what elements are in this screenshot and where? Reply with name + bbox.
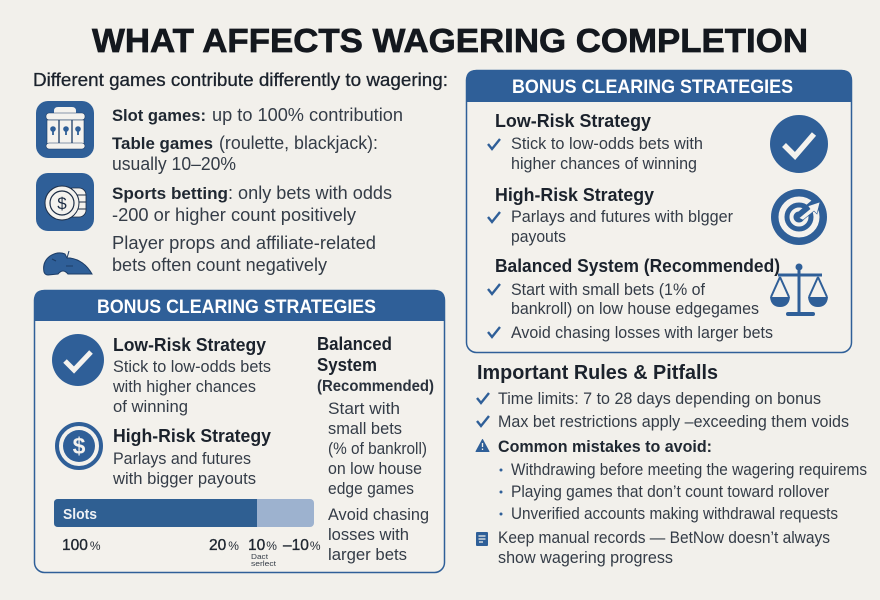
text: low-risk strategy: Low-Risk Strategy [113,335,266,355]
bar value labels: 20% [209,537,239,554]
text: balanced system: (% of bankroll) [328,439,427,458]
bar value labels: Dact [251,554,268,561]
rule: time limits: Time limits: 7 to 28 days depending on bonus [498,389,821,408]
text: low-risk strategy: with higher chances [112,377,256,396]
text: keep manual records: Keep manual records — BetNow doesn’t always [498,528,830,547]
text: balanced system: System [317,355,377,375]
icon: balance scales [770,264,828,316]
text: balanced system: Avoid chasing losses with larger bets [511,323,773,342]
panel header [466,70,852,102]
text: balanced system: Start with small bets (1% of [511,280,705,299]
text: slot games: Slot games: [112,106,206,125]
icon: warning [476,440,489,452]
icon: coins [36,173,94,231]
icon: coins: $ [57,194,67,213]
text: balanced system: Start with [328,399,400,418]
text: high-risk strategy: High-Risk Strategy [495,185,654,205]
text: slot games: up to 100% contribution [212,105,403,125]
bar value labels: 10% [248,537,277,554]
icon: dollar circle [57,424,101,468]
icon: dollar circle: $ [73,433,86,459]
text: keep manual records [498,528,830,567]
text: low-risk strategy: Stick to low-odds bets [113,357,271,376]
text: balanced system: (Recommended) [317,378,434,395]
bar value labels: –10% [283,537,321,554]
text: high-risk strategy: with bigger payouts [112,469,256,488]
text: balanced system: losses with [328,525,409,544]
text: sports betting: Sports betting [112,184,228,203]
text: balanced system: Avoid chasing [328,505,429,524]
text: keep manual records: show wagering progress [498,548,673,567]
panel header: BONUS CLEARING STRATEGIES [97,297,376,318]
icon: target [771,189,827,245]
text: balanced system [317,334,434,564]
text: player props: bets often count negatively [112,255,327,275]
icon: check circle [52,334,104,386]
bar value labels: 100% [62,537,101,554]
text: high-risk strategy: High-Risk Strategy [113,426,271,446]
text: player props [112,233,376,275]
text: low-risk strategy: Stick to low-odds bets with [511,134,703,153]
text: balanced system: Balanced System (Recommended) [495,256,780,276]
text: table games: Table games [112,134,213,153]
text: balanced system: edge games [328,479,414,498]
section: game contributions [33,70,448,275]
text: sports betting: : only bets with odds [228,183,392,203]
text: table games: usually 10–20% [112,154,236,174]
text: balanced system: small bets [328,419,402,438]
title: WHAT AFFECTS WAGERING COMPLETION [92,23,808,60]
chart: contribution bar [54,499,321,568]
heading: Important Rules & Pitfalls [477,362,718,384]
text: high-risk strategy: Parlays and futures with blgger [511,207,733,226]
panel header: BONUS CLEARING STRATEGIES [512,77,793,98]
text: sports betting: -200 or higher count positively [112,205,356,225]
text: high-risk strategy [112,426,271,488]
list: common mistakes: Unverified accounts making withdrawal requests [511,504,838,523]
subheading: common mistakes: Common mistakes to avoid: [498,437,712,456]
section: important rules and pitfalls [476,362,867,567]
icon: check circle [770,115,828,173]
rule: max bet: Max bet restrictions apply –exceeding them voids [498,412,849,431]
text: low-risk strategy: Low-Risk Strategy [495,111,651,131]
chart: contribution bar: Slots [63,506,97,523]
text: balanced system: on low house [328,459,422,478]
text: player props: Player props and affiliate-related [112,233,376,253]
bar value labels: serlect [251,561,276,568]
panel header [34,290,445,321]
text: balanced system: Balanced [317,334,392,354]
icon: negative count mound [44,251,92,275]
panel: bonus clearing strategies (left) [34,290,445,572]
bar value labels [62,537,321,568]
text: balanced system [488,256,780,342]
text: sports betting [112,183,392,225]
text: high-risk strategy [488,185,733,246]
text: low-risk strategy [488,111,703,173]
text: table games: (roulette, blackjack): [219,133,378,153]
text: balanced system: bankroll) on low house edgegames [511,299,759,318]
list: common mistakes [500,460,867,523]
text: high-risk strategy: payouts [511,227,566,246]
text: high-risk strategy: Parlays and futures [113,449,251,468]
icon: record document [476,532,488,546]
text: slot games [112,105,403,125]
text: low-risk strategy: of winning [113,397,188,416]
text: table games [112,133,378,174]
panel: bonus clearing strategies (right) [466,70,852,352]
text: low-risk strategy: higher chances of winning [511,154,697,173]
text: low-risk strategy [112,335,271,416]
text: balanced system: larger bets [328,545,407,564]
list: common mistakes: Playing games that don’t count toward rollover [511,482,829,501]
icon: slot machine [36,101,94,158]
intro text: Different games contribute differently to wagering: [33,70,448,90]
